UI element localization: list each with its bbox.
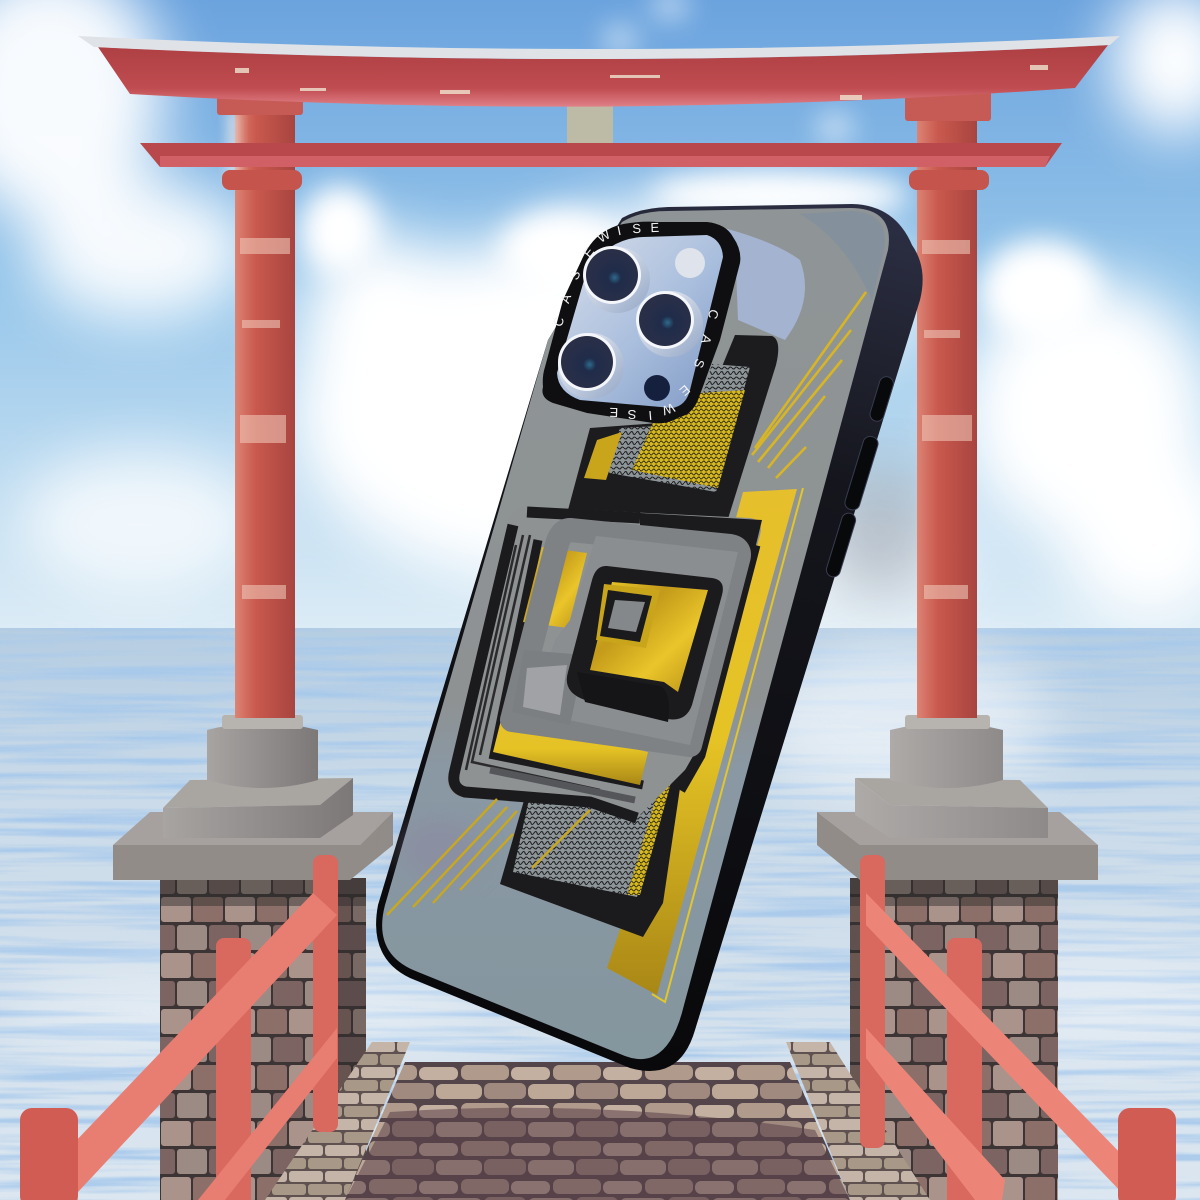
- brand text on ring, upper: A: [557, 292, 574, 305]
- brand text on ring, upper: E: [650, 220, 660, 235]
- brand text on ring, lower: C: [705, 308, 722, 321]
- brand text on ring, lower: E: [676, 382, 693, 399]
- right pillar base: [817, 715, 1098, 880]
- side buttons: [825, 375, 895, 579]
- right railing: [860, 855, 1176, 1200]
- torii upper beam: [78, 36, 1120, 107]
- brand text on ring, upper: E: [580, 244, 597, 260]
- stone walkway: [265, 1042, 930, 1200]
- brand text on ring, lower: A: [698, 333, 715, 346]
- inner black frame: [567, 566, 723, 719]
- torii left pillar: [217, 85, 303, 718]
- left railing: [20, 855, 338, 1200]
- flash: [675, 248, 705, 278]
- left brick pier: [160, 878, 366, 1200]
- bottom gold bar: [493, 712, 648, 785]
- camera plate: [557, 235, 723, 408]
- gold strokes upper right: [752, 292, 866, 478]
- grey interior panel: [530, 536, 738, 745]
- small spiral square: [596, 584, 660, 648]
- lens bottom: [558, 333, 624, 399]
- inner grey stroke shapes: [512, 650, 585, 725]
- sky background: [0, 0, 1200, 630]
- face reflection: [700, 222, 805, 340]
- lens top: [583, 246, 650, 313]
- brand text on ring, lower: S: [691, 357, 708, 370]
- phone: [376, 204, 923, 1071]
- phone body rim: [376, 204, 923, 1071]
- grey overlay band: [512, 530, 739, 745]
- upper textured block: [568, 335, 778, 522]
- left pillar base: [113, 715, 393, 880]
- torii right pillar: [905, 85, 991, 718]
- brand text on ring, upper: C: [550, 315, 567, 328]
- large brush frame: [448, 507, 762, 818]
- lidar sensor: [644, 375, 670, 401]
- inner gold square: [590, 582, 708, 692]
- gold strokes lower left: [387, 799, 590, 915]
- lens right: [636, 291, 703, 357]
- brand text on ring, upper: I: [616, 223, 622, 238]
- brand text on ring, upper: W: [595, 226, 613, 246]
- clouds: [0, 0, 1200, 620]
- torii centre strut: [567, 100, 613, 145]
- camera bump: [542, 220, 740, 423]
- brand text on ring, lower: [609, 308, 722, 423]
- brand text on ring, lower: I: [648, 408, 653, 423]
- phone back face: [382, 208, 889, 1059]
- lower textured block: [500, 750, 700, 937]
- left gold block: [523, 547, 587, 628]
- brand text on ring, upper: S: [632, 221, 642, 236]
- sea with wave lines: [0, 628, 1200, 1200]
- brand text on ring, upper: [550, 220, 660, 328]
- brand text on ring, upper: S: [566, 268, 584, 282]
- torii lower beam: [140, 143, 1062, 167]
- brand text on ring, lower: W: [660, 400, 677, 419]
- gold diagonal band: [607, 488, 803, 1002]
- black brush blob: [577, 672, 669, 722]
- brand text on ring, lower: S: [627, 407, 636, 422]
- brand text on ring, lower: E: [609, 405, 618, 420]
- right brick pier: [850, 878, 1058, 1200]
